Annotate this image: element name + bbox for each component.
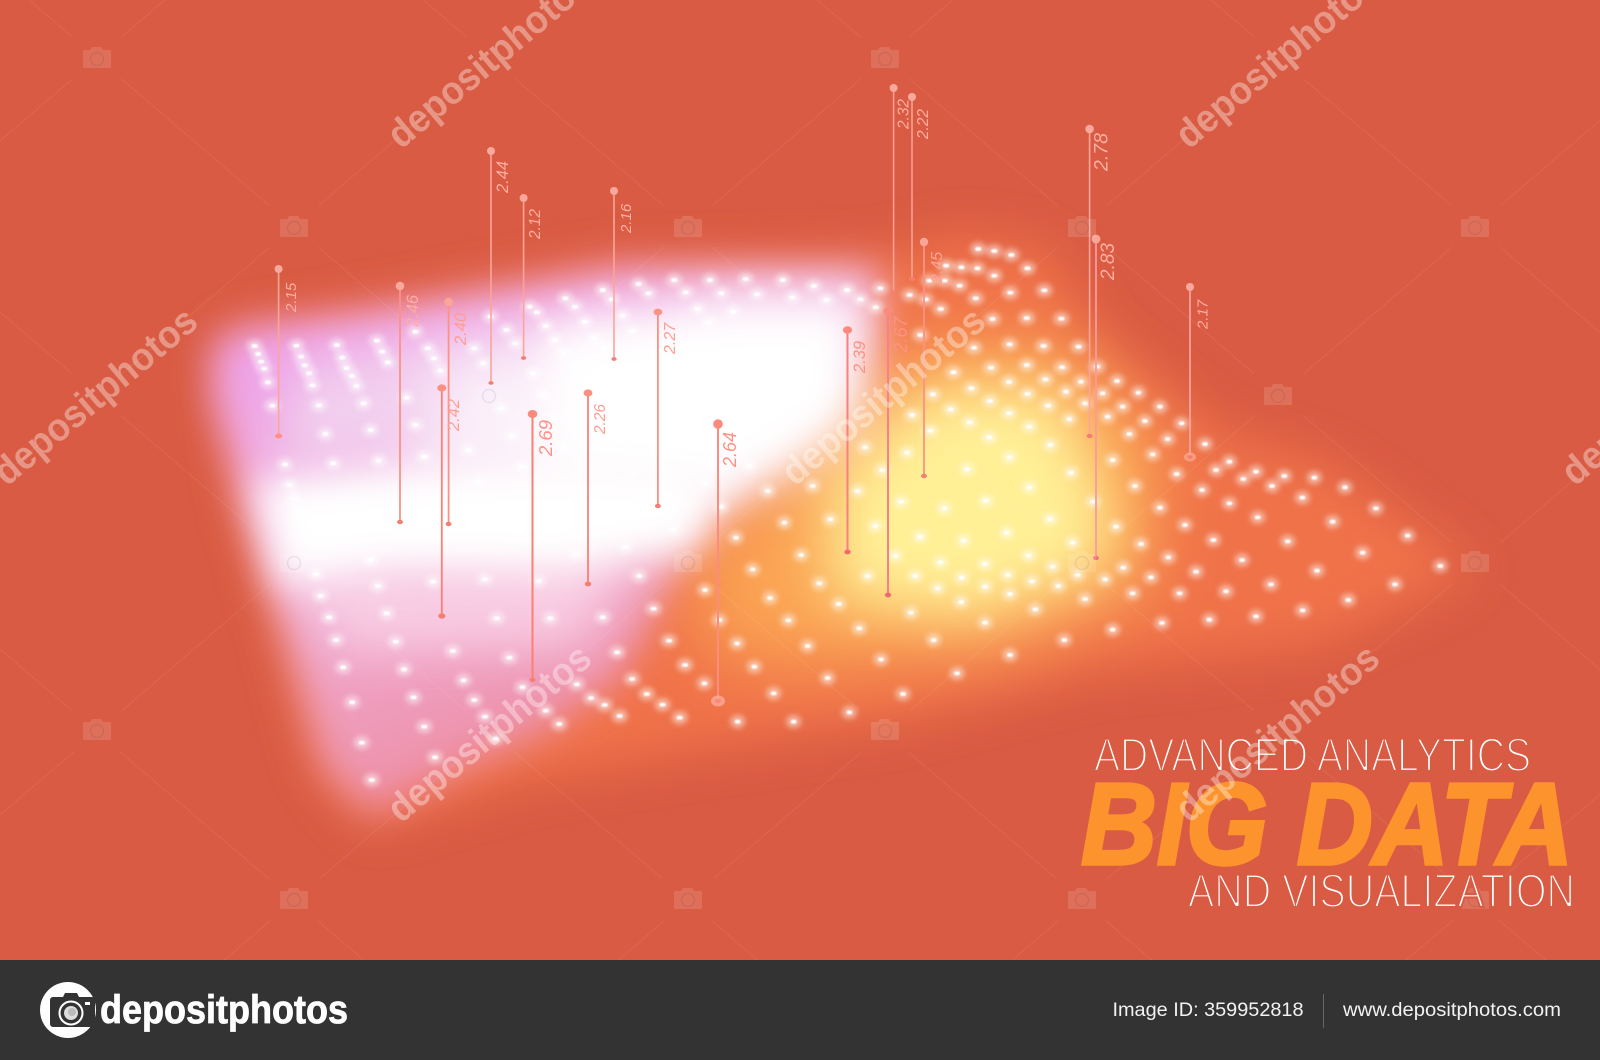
watermark text: depositphotos — [1167, 636, 1388, 831]
pin 2.64: 2.64 — [720, 432, 740, 468]
pin 2.27: 2.27 — [662, 322, 679, 355]
watermark text: depositphotos — [773, 299, 994, 494]
pin 2.12: 2.12 — [527, 209, 544, 240]
pin 2.42 — [437, 384, 463, 619]
watermark cameras — [83, 47, 1489, 909]
pin 2.15 — [275, 265, 300, 438]
pin 2.44 — [487, 147, 512, 385]
footer bar — [0, 960, 1600, 1060]
pin 2.69 — [528, 410, 556, 682]
pin 2.64 — [711, 419, 740, 706]
pin 2.26 — [584, 389, 609, 586]
pin 2.15: 2.15 — [283, 282, 300, 313]
pin 2.32: 2.32 — [896, 99, 913, 130]
pin 2.78 — [1085, 125, 1112, 438]
pin 2.67 — [883, 307, 911, 597]
pin 2.46: 2.46 — [404, 294, 422, 328]
pin 2.44: 2.44 — [494, 161, 512, 194]
pin 2.46 — [396, 282, 422, 524]
pin 2.67: 2.67 — [890, 316, 911, 354]
pin 2.22 — [908, 93, 932, 281]
pin 2.83: 2.83 — [1098, 243, 1119, 281]
icon: logo camera — [40, 982, 96, 1038]
watermark text: depositphotos — [379, 636, 600, 831]
data point grid — [254, 249, 1441, 780]
pin 2.40: 2.40 — [452, 312, 470, 346]
pin 2.39: 2.39 — [851, 341, 869, 374]
pin 2.16 — [610, 187, 635, 361]
pin 2.16: 2.16 — [618, 203, 635, 234]
pin 2.45 — [920, 238, 946, 478]
website url: www.depositphotos.com — [1342, 999, 1561, 1021]
pin 2.17 — [1184, 283, 1212, 462]
pin 2.42: 2.42 — [445, 399, 463, 432]
logo wordmark: depositphotos — [100, 988, 348, 1032]
pin 2.12 — [520, 194, 544, 360]
pin 2.27 — [654, 309, 679, 508]
pin 2.78: 2.78 — [1090, 133, 1112, 172]
pin 2.45: 2.45 — [929, 252, 946, 284]
pin 2.40 — [444, 298, 470, 526]
pin 2.83 — [1092, 235, 1119, 560]
pin 2.32 — [890, 84, 913, 294]
data pins — [275, 84, 1212, 706]
pin 2.69: 2.69 — [535, 420, 556, 457]
pin 2.17: 2.17 — [1194, 299, 1212, 330]
pin 2.26: 2.26 — [592, 404, 609, 435]
watermark text — [0, 0, 1600, 831]
glowing data surface — [212, 235, 1475, 825]
pin 2.22: 2.22 — [915, 109, 932, 140]
pin 2.39 — [843, 326, 869, 554]
image id: Image ID: 359952818 — [1112, 999, 1304, 1021]
